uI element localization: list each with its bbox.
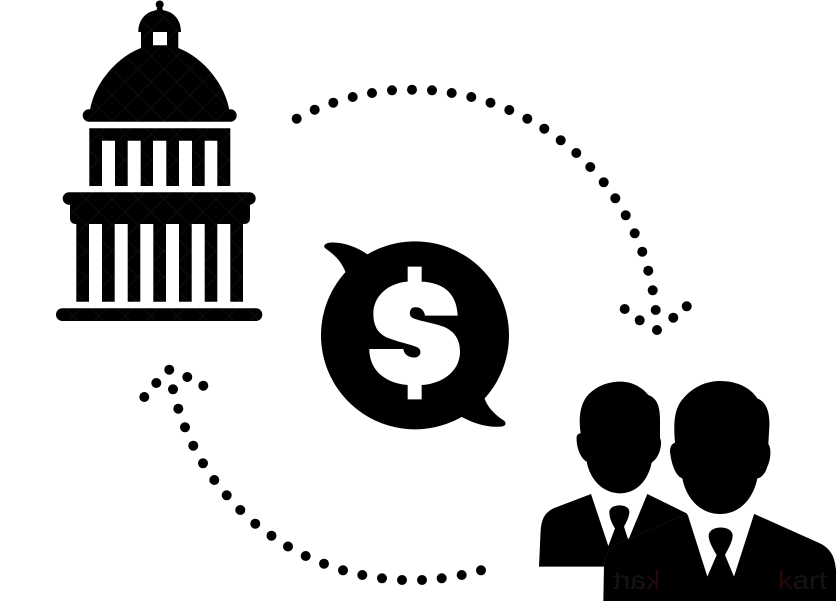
- back person: [539, 382, 697, 567]
- icon: two business people: [539, 381, 836, 601]
- icon: capitol building: [56, 0, 262, 321]
- front person head: [670, 381, 770, 514]
- watermark text: kart: [778, 565, 828, 595]
- icon: dollar speech bubble: [321, 241, 509, 429]
- upper colonnade: [89, 128, 230, 186]
- bubble tail: top left: [324, 243, 368, 273]
- front person body: [603, 514, 836, 601]
- capitol base: [56, 308, 262, 321]
- bubble circle: [321, 241, 509, 429]
- dome base bar: [83, 109, 237, 122]
- front person collar and tie: [687, 513, 754, 577]
- arrow: dotted arc from people to capitol: [139, 365, 486, 585]
- capitol finial: [156, 0, 164, 13]
- back person collar and tie: [591, 494, 647, 546]
- arrow: dotted arc from capitol to people: [292, 85, 692, 335]
- capitol cupola: [138, 10, 181, 52]
- back person body: [539, 494, 697, 567]
- capitol dome: [90, 48, 229, 110]
- front person: [603, 381, 836, 601]
- back person head: [577, 382, 661, 493]
- entablature: [63, 192, 256, 224]
- mirrored watermark text: kart: [612, 565, 660, 595]
- front person shoulder outline: [604, 514, 698, 565]
- bubble tail: bottom right: [460, 397, 506, 427]
- dollar sign: [369, 267, 460, 399]
- lower columns: [76, 224, 243, 302]
